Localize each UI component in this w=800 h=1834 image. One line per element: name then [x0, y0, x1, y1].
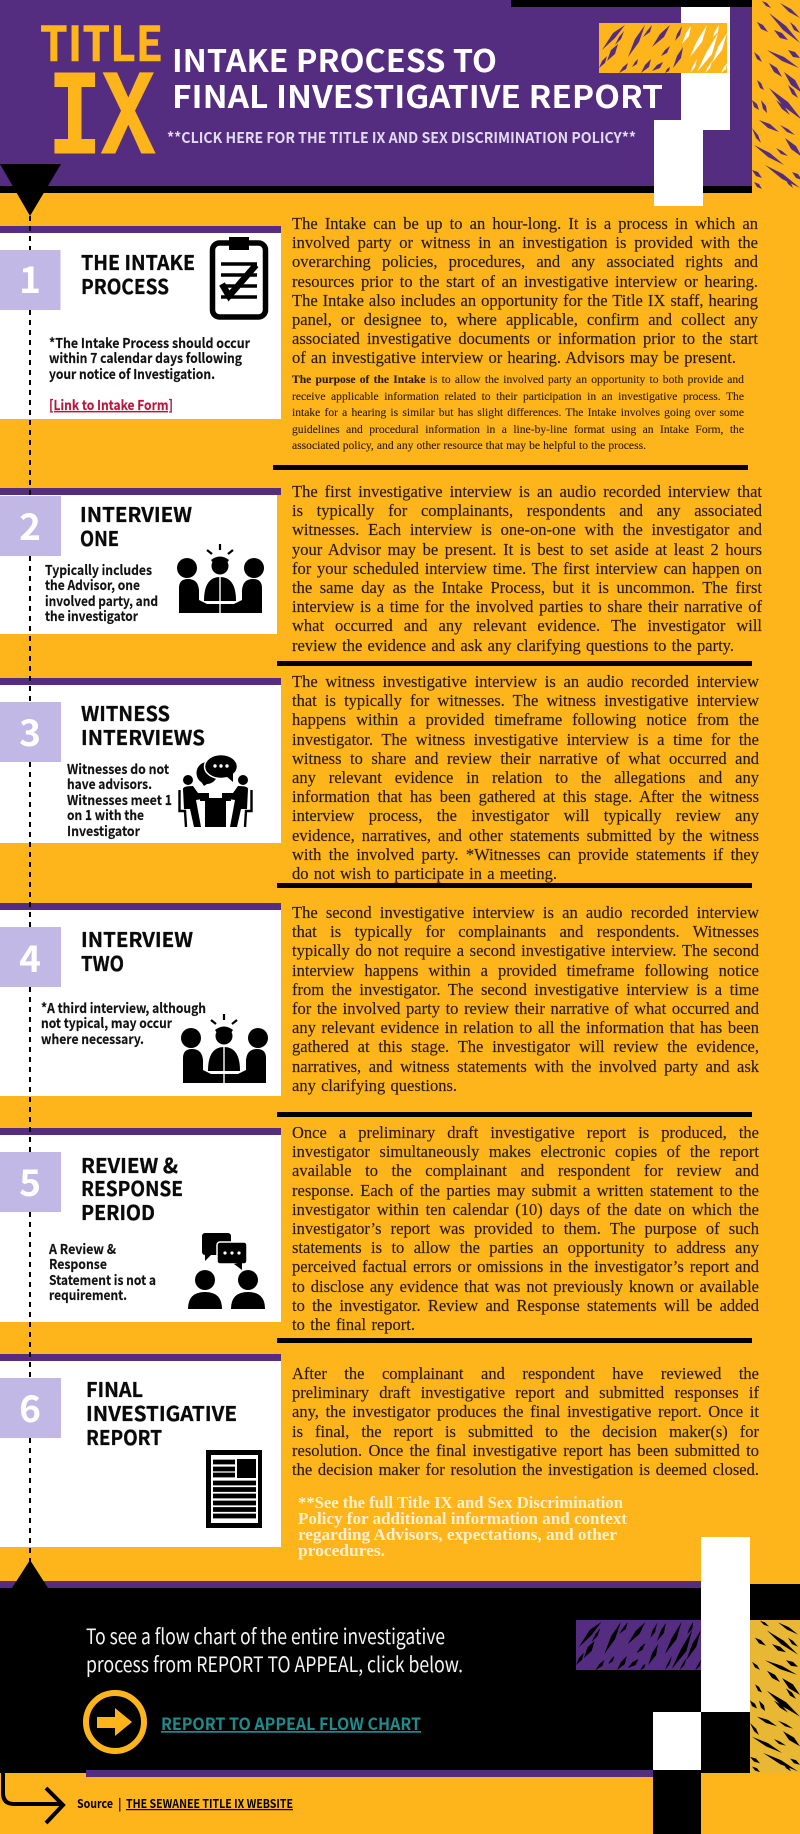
policy note: **See the full Title IX and Sex Discrimination — [298, 1493, 623, 1512]
text block: first interview: for your scheduled interview time. The first interview can happen on — [292, 559, 762, 578]
text block: witness interview: information that has been gathered at this stage. After the witness — [292, 787, 759, 806]
title mark: TITLE IX: IX — [48, 51, 156, 190]
text block: witness interview: any relevant evidence in relation to the allegations and any — [292, 768, 759, 787]
text block: witness interview: evidence, narratives, and other statements submitted by the witness — [292, 826, 759, 845]
note: witnesses: Investigator — [67, 820, 140, 840]
text block: purpose of the intake — [292, 373, 744, 452]
text block: purpose of the intake: intake for a hearing is similar but has slight differences. The Intake involves going over some — [292, 406, 744, 419]
text block: first interview: the same day as the Intake Process, but it is uncommon. The first — [292, 578, 762, 597]
text block: witness interview: happens within a provided timeframe following notice from the — [292, 710, 759, 729]
text block: first interview: review the evidence and ask any clarifying questions to the party. — [292, 636, 734, 655]
flow chart invitation text — [86, 1621, 463, 1679]
text block: first interview: is typically for complainants, respondents and any associated — [292, 501, 762, 520]
text block: review and response: to the investigator. Review and Response statements will be added — [292, 1296, 759, 1315]
text block: second interview: for the involved party to review their narrative of what occurred and — [292, 999, 759, 1018]
text block: second interview — [292, 903, 760, 1095]
note: who attends — [45, 559, 158, 625]
text block: witness interview: that is typically for witnesses. The witness investigative interview — [292, 691, 759, 710]
text block: final report: preliminary draft investigative report and submitted responses if — [292, 1383, 759, 1402]
note: intake timing: within 7 calendar days following — [49, 347, 242, 367]
text block: intake description: overarching policies, procedures, and any associated rights and — [292, 252, 758, 271]
heading: witness interviews — [81, 697, 205, 751]
source line: | — [118, 1795, 122, 1812]
panel: step 6 final report — [0, 1354, 281, 1547]
heading: final investigative report: REPORT — [86, 1421, 162, 1451]
text block: witness interview: The witness investigative interview is an audio recorded interview — [292, 672, 759, 691]
timeline dashed line — [29, 216, 31, 1562]
main heading: INTAKE PROCESS TO — [172, 36, 497, 81]
text block: first interview: The first investigative interview is an audio recorded interview that — [292, 482, 762, 501]
source line: Source — [77, 1795, 113, 1812]
triangle: timeline start — [0, 164, 61, 216]
note: intake timing: your notice of Investigation. — [49, 363, 215, 383]
note: who attends: the investigator — [45, 605, 138, 625]
arrow: source pointer — [3, 1773, 63, 1823]
policy link line: **CLICK HERE FOR THE TITLE IX AND SEX DISCRIMINATION POLICY** — [167, 127, 636, 148]
text block: purpose of the intake: receive applicable information related to their participation in an investigative process. The — [292, 390, 744, 402]
text block: second interview: interview happens within a provided timeframe following notice — [292, 961, 759, 980]
heading: the intake process — [81, 246, 195, 300]
note: who attends: Typically includes — [45, 559, 152, 579]
flow chart invitation text: To see a flow chart of the entire investigative — [86, 1621, 445, 1651]
heading: interview one: ONE — [80, 522, 119, 552]
panel: step 3 witness interviews: 3 — [19, 703, 41, 757]
text block: review and response: investigator simultaneously makes electronic copies of the report — [292, 1142, 759, 1161]
text block: intake description: The Intake also includes an opportunity for the Title IX staff, hearing — [292, 291, 758, 310]
text block: witness interview: witness to share and review their narrative of what occurred and — [292, 749, 759, 768]
header hatched bar — [599, 23, 727, 73]
note: third interview: *A third interview, although — [41, 997, 206, 1017]
panel: step 6 final report: 6 — [19, 1379, 41, 1433]
text block: review and response: available to the complainant and respondent for review and — [292, 1161, 759, 1180]
main heading: FINAL INVESTIGATIVE REPORT — [172, 72, 663, 117]
note: third interview: not typical, may occur — [41, 1012, 172, 1032]
note: statement optional: Statement is not a — [49, 1269, 156, 1289]
note: statement optional: Response — [49, 1253, 107, 1273]
title mark: TITLE IX — [40, 5, 163, 190]
text block: purpose of the intake: associated policy, and any other resource that may be helpful to the process. — [292, 439, 646, 452]
text block: final report — [292, 1364, 760, 1479]
heading: review and response period: RESPONSE — [81, 1172, 183, 1202]
text block: first interview: what occurred and any relevant evidence. The investigator will — [292, 616, 762, 635]
title mark: TITLE IX: TITLE — [40, 5, 163, 75]
heading: the intake process: THE INTAKE — [81, 246, 195, 276]
header banner — [0, 0, 752, 206]
flow chart invitation text: process from REPORT TO APPEAL, click below. — [86, 1649, 463, 1679]
footer hatched bar — [576, 1620, 701, 1670]
note: witnesses: have advisors. — [67, 773, 152, 793]
note: witnesses: Witnesses meet 1 — [67, 789, 172, 809]
text block: witness interview: do not wish to participate in a meeting. — [292, 864, 557, 883]
text block: first interview — [292, 482, 762, 655]
link: intake form: [Link to Intake Form] — [49, 394, 173, 414]
text block: first interview: witnesses. Each interview is one-on-one with the investigator and — [292, 520, 762, 539]
note: who attends: involved party, and — [45, 590, 158, 610]
policy note: regarding Advisors, expectations, and other — [298, 1525, 617, 1544]
heading: witness interviews: INTERVIEWS — [81, 721, 205, 751]
text block: final report: resolution. Once the final investigative report has been submitted to — [292, 1441, 759, 1460]
panel: step 1 intake — [0, 226, 281, 419]
panel: step 2 interview one — [0, 488, 281, 634]
heading: interview two — [81, 923, 193, 977]
policy note: procedures. — [298, 1541, 385, 1560]
icon: meeting at table — [180, 754, 252, 827]
text block: second interview: any relevant evidence in relation to all the information that has been — [292, 1018, 759, 1037]
text block: intake description: involved party or witness in an investigation is provided with the — [292, 233, 758, 252]
icon: report document — [206, 1450, 262, 1528]
heading: review and response period — [81, 1149, 183, 1226]
note: statement optional — [48, 1238, 156, 1304]
text block: final report: is final, the report is submitted to the decision maker(s) for — [292, 1422, 759, 1441]
triangle: timeline end — [12, 1560, 48, 1588]
heading: the intake process: PROCESS — [81, 270, 169, 300]
text block: intake description — [292, 214, 758, 367]
text block: intake description: resources prior to the start of an investigative interview or hearing. — [292, 272, 758, 291]
panel: step 1 intake: 1 — [19, 250, 41, 304]
main heading — [172, 36, 663, 117]
heading: final investigative report: FINAL — [86, 1373, 143, 1403]
text block: witness interview: with the involved party. *Witnesses can provide statements if they — [292, 845, 759, 864]
note: third interview — [41, 997, 206, 1048]
policy note — [298, 1493, 628, 1560]
text block: review and response: Once a preliminary draft investigative report is produced, the — [292, 1123, 759, 1142]
panel: step 2 interview one: 2 — [19, 497, 41, 551]
text block: second interview: gathered at this stage. The investigator will review the evidence, — [292, 1037, 759, 1056]
note: witnesses: Witnesses do not — [67, 758, 169, 778]
footer call to action band — [0, 1537, 800, 1834]
text block: review and response: response. Each of the parties may submit a written statement to the — [292, 1181, 759, 1200]
text block: witness interview: investigator. The witness investigative interview is a time for the — [292, 730, 759, 749]
heading: final investigative report: INVESTIGATIVE — [86, 1397, 237, 1427]
text block: final report: any, the investigator produces the final investigative report. Once it — [292, 1402, 759, 1421]
heading: interview two: TWO — [81, 947, 124, 977]
heading: final investigative report — [86, 1373, 237, 1451]
text block: review and response: to disclose any evidence that was not previously known or available — [292, 1277, 759, 1296]
heading: witness interviews: WITNESS — [81, 697, 170, 727]
text block: purpose of the intake: The purpose of the Intake is to allow the involved party an opportunity to both provide and — [292, 373, 744, 386]
dividers between steps — [273, 465, 752, 1343]
panel: step 4 interview two: 4 — [19, 929, 41, 983]
text block: review and response: investigator within ten calendar (10) days of the date on which the — [292, 1200, 759, 1219]
note: intake timing: *The Intake Process should occur — [49, 332, 250, 352]
text block: review and response — [292, 1123, 759, 1334]
panel: step 3 witness interviews — [0, 678, 281, 843]
panel: step 4 interview two — [0, 903, 281, 1096]
note: third interview: where necessary. — [41, 1028, 144, 1048]
text block: intake description: The Intake can be up to an hour-long. It is a process in which an — [292, 214, 758, 233]
link: report to appeal flow chart: REPORT TO APPEAL FLOW CHART — [161, 1710, 421, 1735]
text block: final report: the decision maker for resolution the investigation is deemed closed. — [292, 1460, 759, 1479]
text block: second interview: from the investigator. The second investigative interview is a time — [292, 980, 759, 999]
heading: interview one: INTERVIEW — [80, 498, 192, 528]
note: statement optional: A Review & — [48, 1238, 116, 1258]
text block: intake description: associated investigative documents or information prior to the start — [292, 329, 758, 348]
heading: review and response period: PERIOD — [81, 1196, 155, 1226]
note: intake timing — [49, 332, 250, 383]
text block: second interview: any clarifying questions. — [292, 1076, 457, 1095]
header hatched strip — [752, 0, 800, 190]
source line: THE SEWANEE TITLE IX WEBSITE — [126, 1795, 293, 1812]
text block: first interview: interview is a time for the involved parties to share their narrative of — [292, 597, 762, 616]
icon: three people — [181, 1014, 268, 1083]
text block: witness interview — [292, 672, 760, 883]
icon: two people talking — [188, 1233, 265, 1309]
text block: intake description: panel, or designee to, where applicable, confirm and collect any — [292, 310, 758, 329]
heading: interview two: INTERVIEW — [81, 923, 193, 953]
note: witnesses — [67, 758, 172, 840]
heading: interview one — [80, 498, 192, 552]
text block: witness interview: interview process, the investigator will typically review any — [292, 806, 759, 825]
text block: review and response: to the final report. — [292, 1315, 415, 1334]
note: witnesses: on 1 with the — [67, 804, 144, 824]
text block: review and response: statements is to allow the parties an opportunity to address any — [292, 1238, 759, 1257]
text block: first interview: your Advisor may be present. It is best to set aside at least 2 hours — [292, 540, 762, 559]
note: statement optional: requirement. — [49, 1284, 127, 1304]
text block: second interview: that is typically for complainants and respondents. Witnesses — [292, 922, 759, 941]
text block: second interview: narratives, and witness statements with the involved party and ask — [292, 1057, 759, 1076]
footer hatched strip — [750, 1620, 800, 1773]
icon: clipboard — [212, 237, 266, 317]
panel: step 5 review and response: 5 — [19, 1153, 41, 1207]
text block: review and response: investigator’s report was provided to them. The purpose of such — [292, 1219, 759, 1238]
panel: step 5 review and response — [0, 1128, 281, 1322]
icon: three people — [177, 544, 264, 613]
policy note: Policy for additional information and context — [298, 1509, 628, 1528]
note: who attends: the Advisor, one — [45, 574, 140, 594]
text block: second interview: The second investigative interview is an audio recorded interview — [292, 903, 759, 922]
icon: arrow in circle — [86, 1693, 144, 1751]
text block: final report: After the complainant and respondent have reviewed the — [292, 1364, 759, 1383]
text block: second interview: typically do not require a second investigative interview. The second — [292, 941, 759, 960]
text block: purpose of the intake: guidelines and procedural information in a line-by-line format using an Intake Form, the — [292, 422, 744, 436]
text block: review and response: perceived factual errors or omissions in the investigator’s report and — [292, 1257, 759, 1276]
heading: review and response period: REVIEW & — [81, 1149, 178, 1179]
text block: intake description: of an investigative interview or hearing. Advisors may be present. — [292, 348, 736, 367]
